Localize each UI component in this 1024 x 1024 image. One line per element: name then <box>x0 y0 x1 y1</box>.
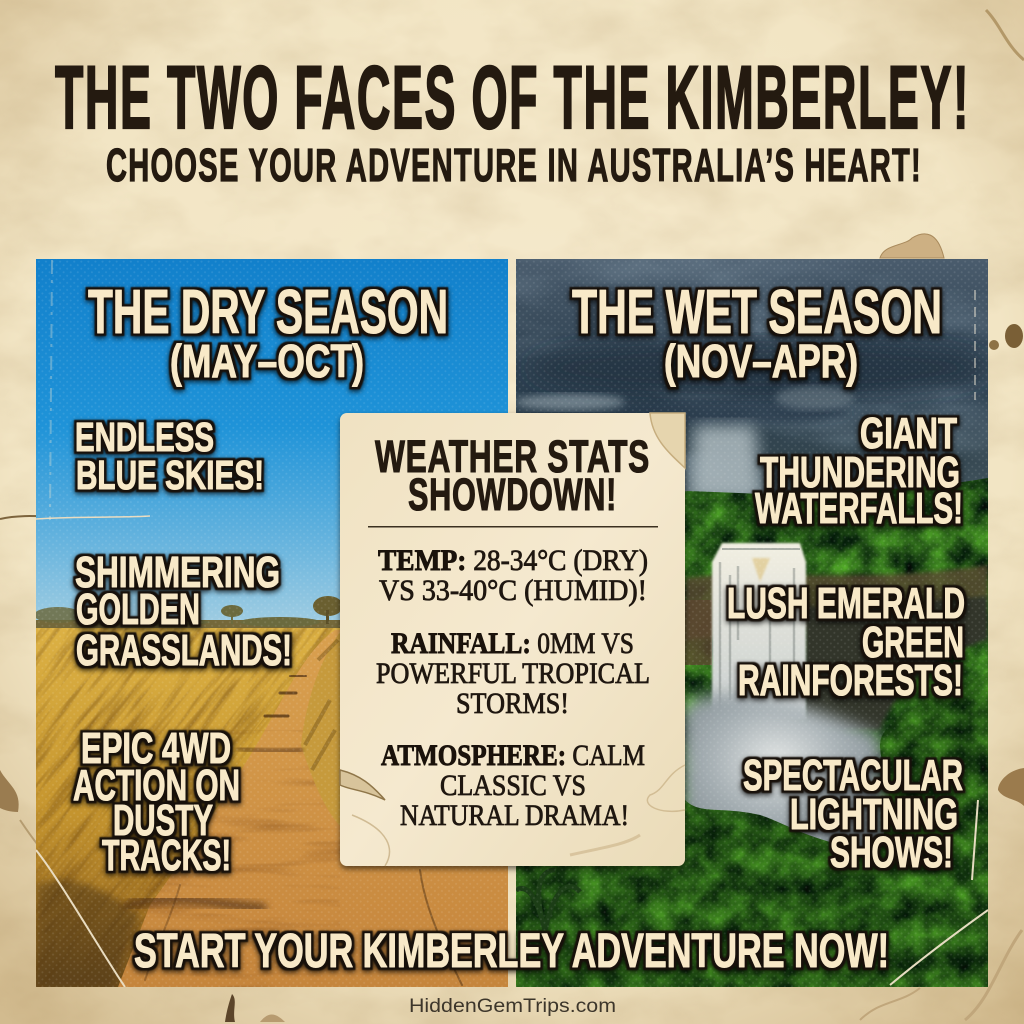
dry feature: grasslands: GOLDEN <box>76 585 200 634</box>
wet feature: waterfalls: GIANT <box>860 409 957 458</box>
card heading: WEATHER STATS <box>375 431 650 482</box>
card paper <box>340 413 685 866</box>
golden grass <box>36 628 340 987</box>
crack <box>890 910 988 985</box>
cliff <box>685 565 988 640</box>
wet feature: lightning <box>743 751 963 877</box>
dry feature: grasslands <box>75 548 292 675</box>
dry feature: 4WD: ACTION ON <box>73 761 240 810</box>
card stains <box>340 413 685 866</box>
panel: wet season scene <box>515 259 990 987</box>
dry season heading: (MAY–OCT) <box>170 335 364 387</box>
dry feature: blue skies: BLUE SKIES! <box>76 452 264 498</box>
stat: atmosphere: NATURAL DRAMA! <box>400 799 629 832</box>
wet feature: lightning: SHOWS! <box>830 828 953 877</box>
stat: temperature: VS 33-40°C (HUMID)! <box>379 574 647 607</box>
dry feature: 4WD <box>73 724 240 880</box>
track shadows <box>130 676 462 985</box>
wet feature: rainforests: GREEN <box>862 618 964 667</box>
dry feature: 4WD: EPIC 4WD <box>81 724 231 773</box>
stat: rainfall: RAINFALL: 0MM VS <box>391 627 634 660</box>
stat: rainfall: POWERFUL TROPICAL <box>376 657 650 690</box>
stat: atmosphere: CLASSIC VS <box>440 769 586 802</box>
dirt track <box>118 630 508 987</box>
card heading: SHOWDOWN! <box>408 469 617 520</box>
dry feature: 4WD: TRACKS! <box>102 831 231 880</box>
panel: dry season scene <box>34 259 508 987</box>
rain shaft <box>688 425 762 500</box>
stat: temperature: TEMP: 28-34°C (DRY) <box>378 544 648 577</box>
card heading <box>375 431 650 520</box>
wet feature: rainforests <box>727 579 965 705</box>
jungle <box>685 478 988 834</box>
mist <box>682 694 892 860</box>
storm sky <box>516 259 988 499</box>
dark lower-left grass <box>36 880 140 987</box>
dry feature: grasslands: GRASSLANDS! <box>76 626 292 675</box>
dry season heading: THE DRY SEASON <box>88 278 448 347</box>
dry feature: grasslands: SHIMMERING <box>75 548 280 597</box>
waterfall <box>712 543 806 720</box>
wet season heading <box>572 278 942 387</box>
distant trees <box>36 596 340 628</box>
stat: rainfall <box>376 627 650 720</box>
wet feature: waterfalls <box>755 409 963 533</box>
crack in print <box>36 850 125 987</box>
stat: atmosphere <box>381 739 645 832</box>
foreground canopy <box>516 672 988 987</box>
dry season heading <box>88 278 448 387</box>
stat: atmosphere: ATMOSPHERE: CALM <box>381 739 645 772</box>
website credit: HiddenGemTrips.com <box>409 996 616 1017</box>
wet season heading: (NOV–APR) <box>664 335 858 387</box>
stat: rainfall: STORMS! <box>456 687 569 720</box>
sky <box>36 259 508 631</box>
dry feature: 4WD: DUSTY <box>113 796 213 845</box>
stat: temperature <box>378 544 648 607</box>
dry feature: blue skies: ENDLESS <box>75 414 214 460</box>
panel: weather stats card <box>340 413 685 866</box>
palm <box>516 870 580 930</box>
dry feature: blue skies <box>75 414 264 498</box>
roadside grass strip <box>301 632 340 826</box>
